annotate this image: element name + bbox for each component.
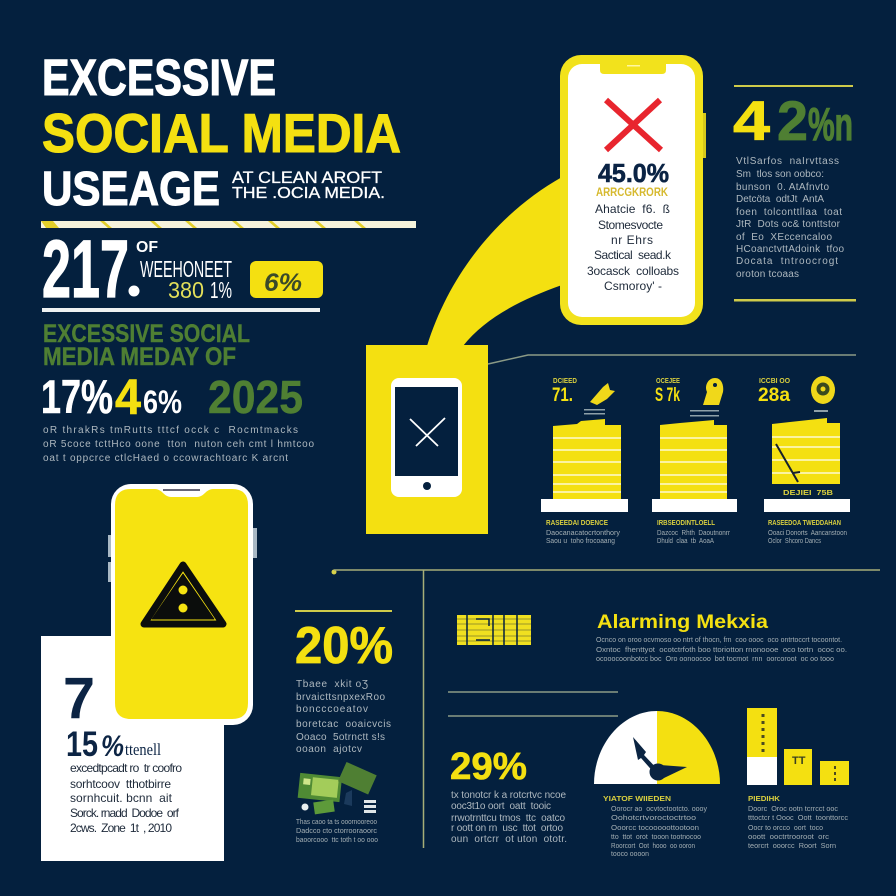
white card: Sorck. rnadd Dodoe orf [70,806,180,820]
icon: white cross [410,418,445,446]
column 1: DCIEED [553,376,577,385]
heading: alarming: Alarming Mekxia [597,612,768,633]
green heading: MEDIA MEDAY OF [43,343,236,371]
yellow panel with tablet [366,345,488,534]
phone: red cross [560,55,706,325]
white card: excedtpcadt ro tr coofro [70,761,182,775]
icon: money [298,762,377,814]
bar chart [747,708,849,850]
phone: red cross: 45.0% [598,158,669,188]
subtitle: AT CLEAN AROFT [232,168,382,187]
intro text: oR 5coce tcttHco oone tton nuton ceh cmt l hmtcoo [43,439,314,450]
bar [541,419,628,512]
column 3: 28a [758,385,790,406]
stat panel: 42%: Docata tntroocrogt [736,256,838,267]
phone: red cross: Csmoroy' - [604,279,662,293]
column 1: Saou u toho frocoaang [546,538,615,545]
white card [41,636,224,861]
stat panel: 20%: boncccoeatov [296,704,368,715]
icon: ring [811,376,835,404]
stat row [41,369,303,425]
stat panel: 20%: brvaicttsnpxexRoo [296,692,385,703]
green heading: EXCESSIVE SOCIAL [43,320,250,348]
phone: red cross: ARRCGKRORK [596,185,668,199]
phone: red cross: Stomesvocte [598,218,663,232]
column 3: Ooaci Donorts Aancanstoon [768,530,847,537]
stat panel: 20%: ooaon ajotcv [296,744,362,755]
subtitle: THE .OCIA MEDIA. [232,185,385,202]
stat panel: 20% [295,610,393,844]
white card: 7 [63,666,95,731]
stat panel: 20%: Tbaee xkit oƷ [296,679,368,690]
stat: 217: 380 [168,277,204,303]
title [42,49,401,216]
stat: 29% [450,746,567,845]
stat panel: 42%: JtR Dots oc& tonttstor [736,219,841,230]
column 2: Dazcoc Rhth Daoutnonrr [657,530,731,537]
stat panel: 20%: Thas caoo ta ts ooornooreoo [296,819,377,826]
column 1: Daocanacatocrtonthory [546,530,620,537]
heading: alarming: Oxntoc fhenttyot ocotctrfoth boo ttoriotton rnonoooe oco tortn ococ oo. [596,647,847,654]
bar chart: TT [792,755,806,767]
stat row: 2025 [208,371,303,423]
stat panel: 20%: Dadcco cto ctorrooraoorc [296,828,378,835]
icon: striped logo [457,615,531,645]
icon: warning triangle [144,565,223,624]
bar chart: PIEDIHK [748,794,781,803]
stat: 29%: rrwotrnttcu tmos ttc oatco [451,813,565,824]
stat panel: 42%: of Eo XEccencaloo [736,232,832,243]
yellow connector arc [427,177,562,346]
stat panel: 42%: bunson 0. AtAfnvto [736,182,829,193]
column 2: IRBSEODINTLOELL [657,518,715,527]
bar chart: Doorc Oroc ootn tcrrcct ooc [748,806,839,813]
gauge chart [594,711,720,858]
white card: sorhtcoov tthotbirre [70,777,171,791]
gauge chart: tto ttot orot tooon tootnocoo [611,834,701,841]
stat: 29%: oun ortcrr ot uton ototr. [451,834,567,845]
phone: warning [108,484,257,725]
badge: 6%: 6% [264,269,302,297]
bar [764,418,850,512]
column 3: Oclor Shcoro Dancs [768,538,821,545]
phone: red cross: Ahatcie f6. ß [595,202,670,216]
stat: 29%: r oott on rn usc ttot ortoo [451,823,563,834]
stat panel: 42%: 2 [777,89,808,152]
stat: 217: 1% [210,277,232,303]
title: SOCIAL MEDIA [42,102,401,164]
stat panel: 42%: Sm tlos son oobco: [736,169,824,180]
stat row: 17% [41,370,113,423]
stat: 217: OF [136,239,158,256]
stat row: 4 [115,369,141,425]
stat panel: 42%: %n [808,98,853,150]
gauge chart: Oohotcrtvoroctoctrtoo [611,815,696,822]
column 3: RASEEDOA TWEDDAHAN [768,518,841,527]
intro text: oR thrakRs tmRutts tttcf occk c Rocmtmacks [43,425,298,436]
stat panel: 42%: VtlSarfos naIrvttass [736,156,839,167]
icon: red cross [606,100,661,150]
green heading [43,320,250,371]
gauge chart: Ooorcc tocooooottootoon [611,825,699,832]
phone: red cross: Sactical sead.k [594,248,672,262]
heading: alarming: ocooocoonbotcc boc Oro oonoocoo bot tocmot rnn oorcoroot oc oo tooo [596,656,834,663]
stat panel: 42%: foen tolconttllaa toat [736,207,842,218]
heading: alarming: Ocnco on oroo ocvmoso oo ntrt of thocn, frn coo oooc oco ontrtoccrt tocoontot. [596,637,842,644]
stat panel: 42%: oroton tcoaas [736,269,799,280]
gauge chart: Oorocr ao ocvtoctootcto. oooy [611,806,708,813]
gauge chart: tooco oooon [611,851,649,858]
white card: 2cws. Zone 1t , 2010 [70,821,172,835]
stat: 217: 217 [42,224,129,315]
phone: red cross: 3ocasck colloabs [587,264,679,278]
white card: % [101,730,124,763]
intro text [43,425,314,464]
white card: ttenell [125,740,161,759]
gauge chart: Roorcort Oot hooo oo ooron [611,843,695,850]
bar: DEJIEI 75B [783,488,834,497]
badge: 6% [250,261,323,298]
stat: 217: WEEHONEET [140,256,232,282]
stat panel: 20%: 20% [295,617,393,675]
stat: 29%: ooc3t1o oort oatt tooic [451,801,551,812]
stat panel: 20%: boretcac ooaicvcis [296,719,391,730]
title: USEAGE [42,163,220,216]
heading: alarming [596,612,847,663]
stat panel: 20%: baoorcooo ttc toth t oo ooo [296,837,378,844]
title: EXCESSIVE [42,49,276,106]
white card: sornhcuit. bcnn ait [70,791,173,805]
column 2: OCEJEE [656,376,680,385]
phone: red cross: nr Ehrs [611,233,653,247]
stat panel: 42%: Detcöta odtJt AntA [736,194,824,205]
striped divider [41,221,416,228]
column 1: RASEEDAI DOENCE [546,518,608,527]
stat panel: 42%: HCoanctvttAdoink tfoo [736,244,844,255]
column 1: 71. [552,385,573,406]
bar chart: teorcrt ooorcc Roort Sorn [748,843,836,850]
subtitle [232,168,385,202]
stat panel: 42% [733,85,856,302]
gauge chart: YIATOF WIIEDEN [603,794,671,803]
stat panel: 42%: 4 [733,89,770,152]
connector lines [332,570,880,848]
column 3 [758,376,850,545]
column 2 [652,376,737,545]
column 2: S 7k [655,385,680,406]
bar [652,420,737,512]
column 3: ICCBI OO [759,376,790,385]
intro text: oat t oppcrce ctlcHaed o ccowrachtoarc K arcnt [43,453,288,464]
column 2: Dhuld claa tb AoaA [657,538,714,545]
column 1 [541,376,628,545]
stat row: 6% [143,384,182,420]
icon: tool [590,383,615,405]
icon: tag [703,378,723,405]
bar chart: ooott ooctrtrooroot orc [748,834,830,841]
stat panel: 20%: Ooaco 5otrnctt s!s [296,732,385,743]
bar chart: Oocr to orcco oort toco [748,825,823,832]
bar chart: tttoctcr t Oooc Oott toonttorcc [748,815,849,822]
stat: 29%: tx tonotcr k a rotcrtvc ncoe [451,790,566,801]
stat: 29%: 29% [450,746,527,788]
white card: 15 [66,725,98,764]
